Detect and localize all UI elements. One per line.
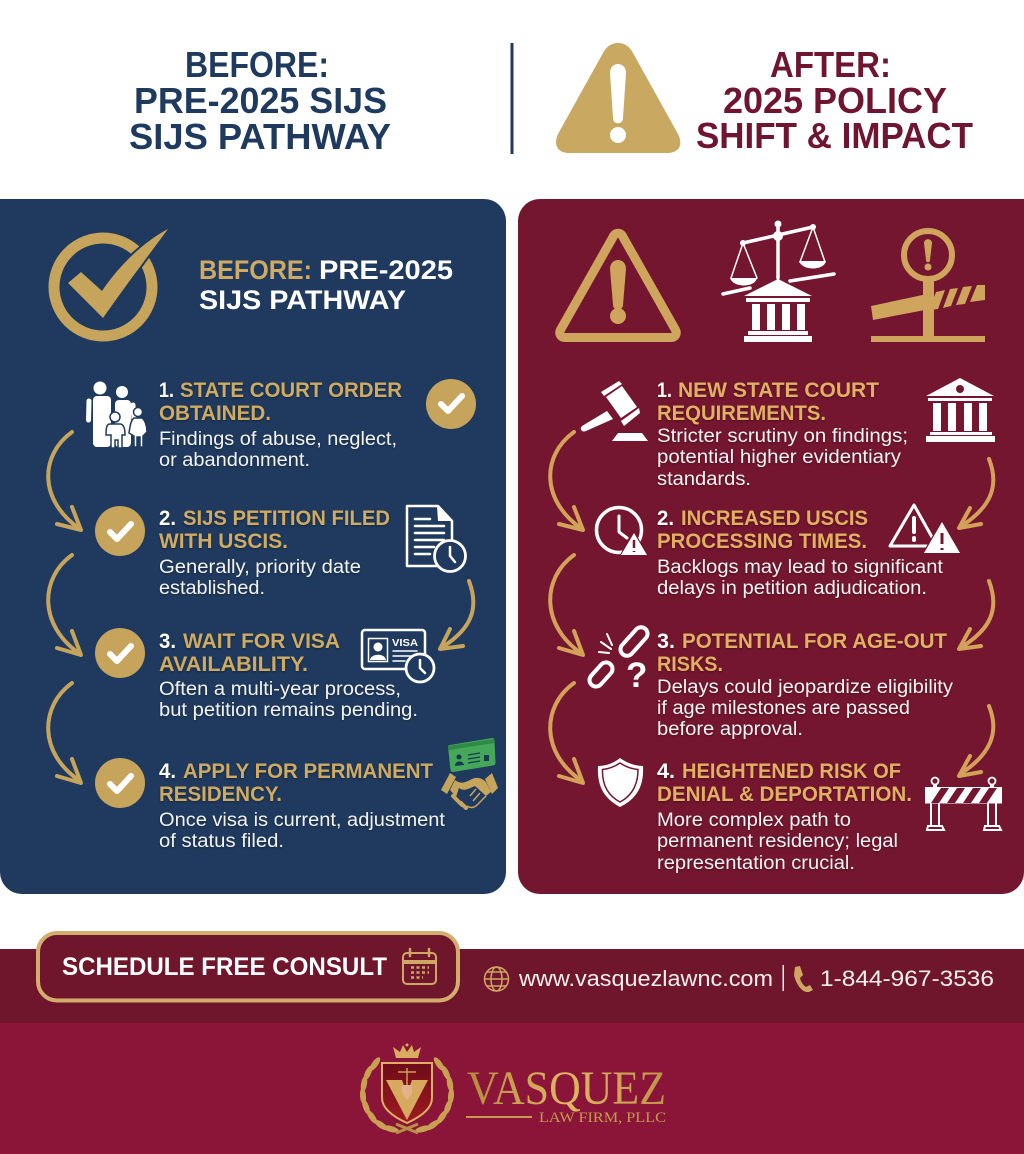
icon: broken link and question mark [587,625,650,695]
icon: broken link and question mark: ? [626,656,647,695]
step 4: HEIGHTENED RISK OF [682,760,901,783]
step 3: Delays could jeopardize eligibility [657,677,954,698]
icon: family [88,382,147,448]
heading: before: BEFORE: [185,44,329,85]
step 2: 2. [159,507,176,530]
step 4: 4. [159,760,176,783]
icon: large check in circle [54,229,168,336]
icon: calendar [403,949,436,984]
step 2: 2. [657,507,674,530]
icon: visa card with clock [362,630,434,682]
step 2: PROCESSING TIMES. [657,530,867,553]
step 4: 4. [657,760,675,783]
panel heading: BEFORE: [199,255,312,285]
heading: before [129,44,391,157]
step 3: but petition remains pending. [159,700,418,721]
step 4: APPLY FOR PERMANENT [183,760,433,783]
step 4: permanent residency; legal [657,831,898,852]
step 1: or abandonment. [159,450,310,471]
step 4 [159,760,446,852]
step 2: INCREASED USCIS [681,507,868,530]
arrow left 1 to 2 [550,432,583,530]
button: schedule free consult: SCHEDULE FREE CONSULT [62,953,387,981]
panel heading [199,255,453,315]
icon: check badge 1 [426,379,476,429]
arrow 2 to 3 [48,555,81,655]
icon: scales over courthouse [723,220,834,342]
arrow left 3 to 4 [550,683,583,783]
arrow 1 to 2 [48,432,81,530]
icon: barrier with warning sign [871,231,985,342]
step 2: WITH USCIS. [159,530,288,553]
step 2: Backlogs may lead to significant [657,557,944,578]
step 2: established. [159,578,265,599]
step 2: delays in petition adjudication. [657,578,927,599]
phone number: 1-844-967-3536 [820,966,994,991]
arrow right 3 to 4 [959,706,993,776]
icon: phone [794,966,813,992]
step 4: Once visa is current, adjustment [159,810,446,831]
heading: after: 2025 POLICY [723,80,947,121]
step 1: STATE COURT ORDER [180,379,402,402]
arrow right 1 to 2 [959,459,993,528]
step 1: potential higher evidentiary [657,447,902,468]
step 1: Findings of abuse, neglect, [159,429,397,450]
step 1: Stricter scrutiny on findings; [657,426,908,447]
icon: visa card with clock: VISA [392,637,418,649]
step 2 [657,507,944,599]
logo: firm name: LAW FIRM, PLLC [539,1110,666,1126]
step 1: NEW STATE COURT [678,379,879,402]
arrow 3 to 4 [48,683,81,783]
step 2: SIJS PETITION FILED [183,507,390,530]
website: www.vasquezlawnc.com [518,966,773,991]
panel heading: SIJS PATHWAY [199,285,406,315]
footer logo band [0,1023,1024,1154]
icon: check badge 4 [95,758,145,808]
icon: clock with warning [596,508,647,555]
arrow left 2 to 3 [550,555,583,655]
step 3: WAIT FOR VISA [183,630,340,653]
icon: header warning triangle [556,43,680,153]
step 3: if age milestones are passed [657,698,910,719]
step 4: representation crucial. [657,853,855,874]
footer contact band [0,933,1024,1024]
step 1: 1. [159,379,174,402]
icon: check badge 3 [95,628,145,678]
step 1: standards. [657,469,751,490]
step 4: DENIAL & DEPORTATION. [657,783,912,806]
icon: globe [484,967,508,991]
step 1: REQUIREMENTS. [657,402,826,425]
step 4: More complex path to [657,810,851,831]
logo: firm name: VASQUEZ [467,1062,666,1115]
step 4: RESIDENCY. [159,783,282,806]
icon: document with clock [407,506,466,572]
step 1 [159,379,402,471]
step 3 [159,630,418,721]
step 3: POTENTIAL FOR AGE-OUT [682,630,947,653]
step 4: of status filed. [159,831,284,852]
logo: crest [359,1044,455,1134]
icon: handshake [441,773,498,808]
icon: check badge 2 [95,506,145,556]
step 1 [657,379,908,490]
heading: before: SIJS PATHWAY [129,116,391,157]
step 1: 1. [657,379,672,402]
step 3: before approval. [657,719,803,740]
heading: after: AFTER: [770,44,891,85]
icon: double warning triangles [890,505,960,553]
step 4 [657,760,912,874]
heading: after: SHIFT & IMPACT [696,115,973,156]
step 3: Often a multi-year process, [159,679,401,700]
panel: before pathway [0,199,506,894]
step 3 [657,630,954,740]
icon: shield [598,758,643,807]
icon: green card [448,738,496,772]
heading: before: PRE-2025 SIJS [134,80,387,121]
icon: warning triangle [560,233,676,338]
step 2 [159,507,390,599]
step 3: AVAILABILITY. [159,653,308,676]
icon: road barricade [926,778,1001,830]
panel heading: PRE-2025 [319,255,453,285]
button: schedule free consult [38,933,458,1000]
arrow document to visa [440,581,473,649]
step 2: Generally, priority date [159,557,361,578]
heading: after [696,44,973,156]
icon: courthouse [926,378,995,442]
icon: gavel [581,381,648,441]
step 3: 3. [657,630,675,653]
panel: after policy shift [518,199,1024,894]
step 1: OBTAINED. [159,402,271,425]
arrow right 2 to 3 [959,581,993,649]
step 3: 3. [159,630,176,653]
step 3: RISKS. [657,653,723,676]
